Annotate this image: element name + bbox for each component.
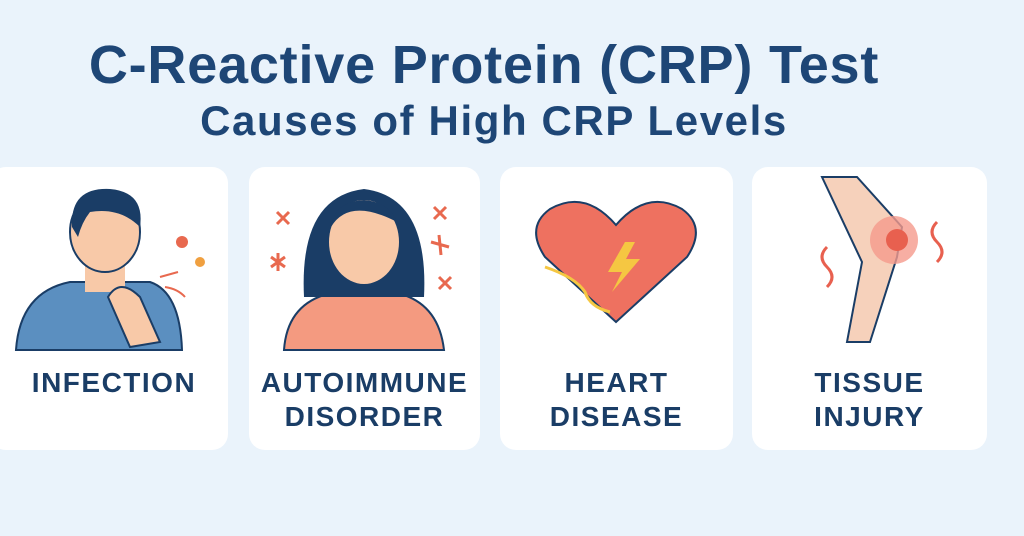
- label: AUTOIMMUNE: [261, 367, 468, 398]
- label: HEART: [565, 367, 668, 398]
- label: INFECTION: [32, 367, 196, 398]
- label: [550, 367, 683, 432]
- icon: heart: [535, 200, 697, 324]
- label: INJURY: [814, 401, 925, 432]
- label: TISSUE: [814, 367, 925, 398]
- panel: heart disease: [500, 167, 733, 450]
- panel: autoimmune: [249, 167, 480, 450]
- label: [814, 367, 925, 432]
- label: DISEASE: [550, 401, 683, 432]
- title: C-Reactive Protein (CRP) Test: [89, 35, 879, 95]
- panel: infection: [0, 167, 228, 450]
- label: DISORDER: [285, 401, 444, 432]
- label: [261, 367, 468, 432]
- icon: knee: [820, 176, 944, 343]
- icon: sick man: [14, 188, 205, 351]
- icon: woman: [270, 189, 452, 351]
- subtitle: Causes of High CRP Levels: [200, 97, 788, 144]
- panel: tissue injury: [752, 167, 987, 450]
